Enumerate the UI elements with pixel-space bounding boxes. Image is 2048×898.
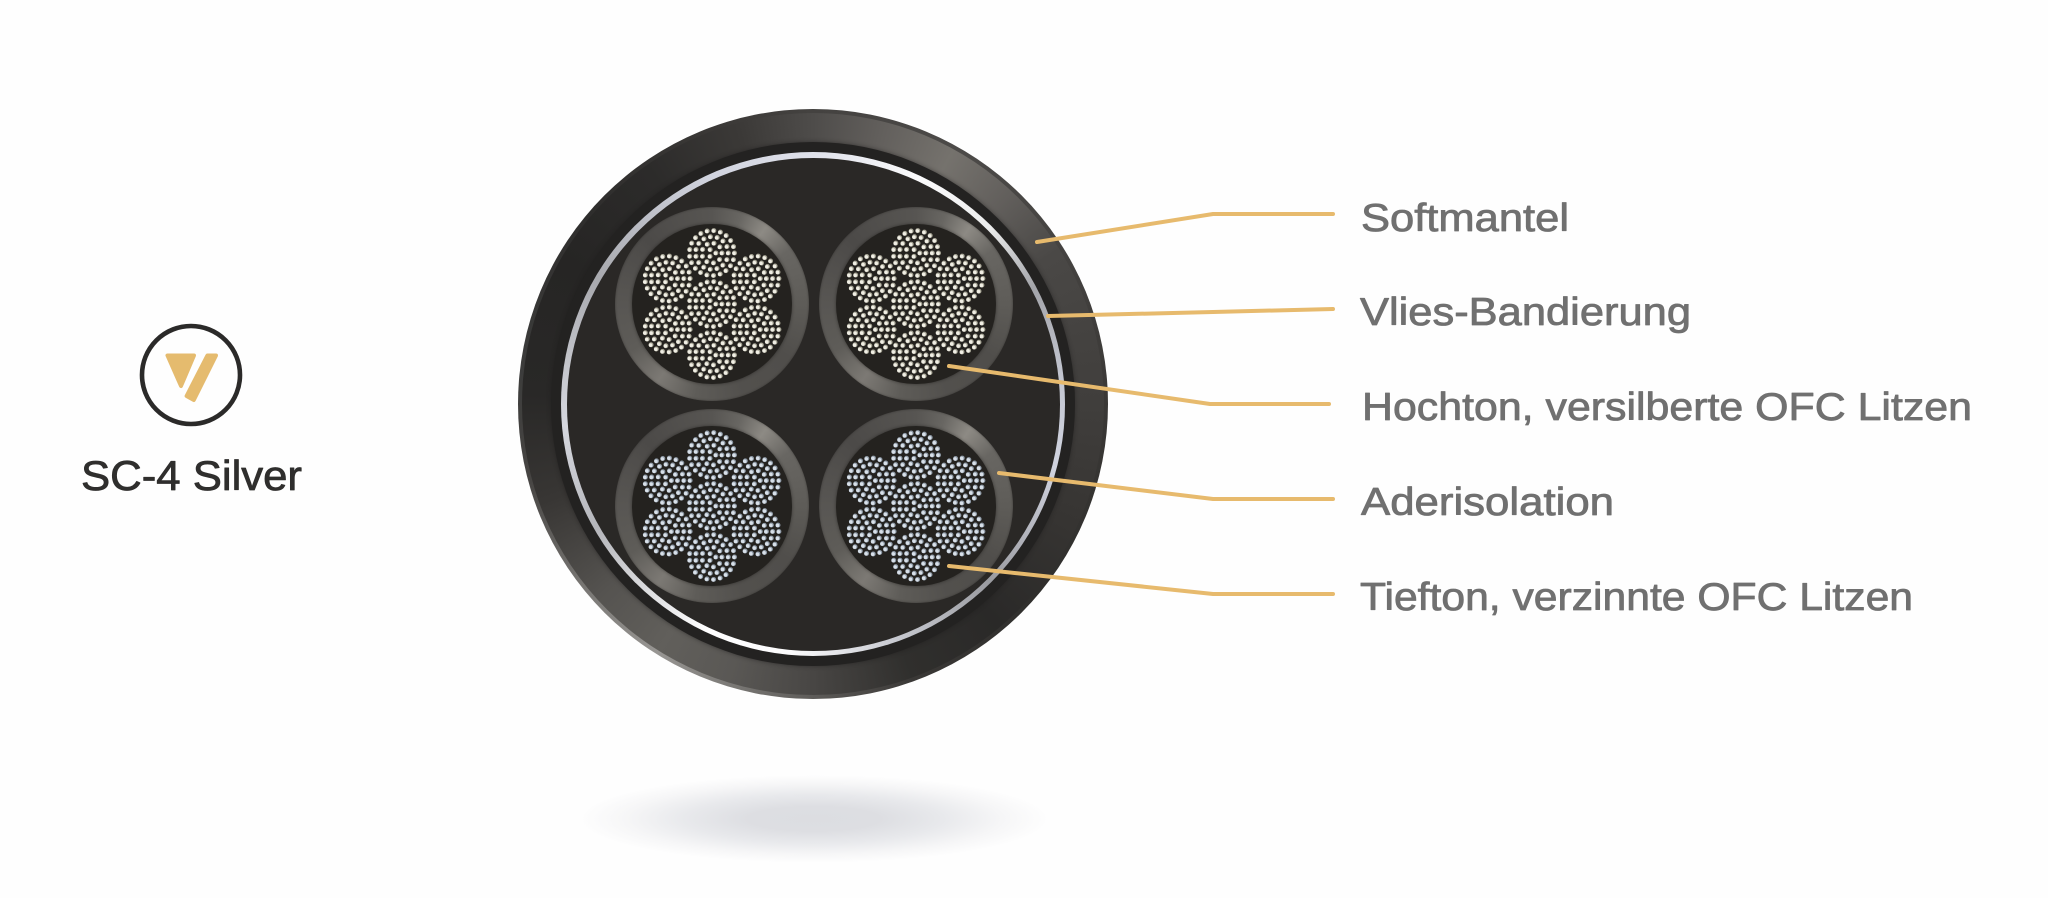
logo icon: V in circle (140, 324, 242, 426)
label: Hochton: Hochton, versilberte OFC Litzen (1362, 386, 1972, 429)
cable filler (566, 158, 1060, 650)
leader line: Aderisolation (999, 473, 1333, 499)
cable cross-section (518, 109, 1108, 699)
drop shadow under cable (579, 775, 1049, 863)
product name: SC-4 Silver (81, 452, 302, 499)
outer soft jacket (522, 113, 1104, 695)
inner dark band (551, 142, 1075, 666)
outer bevel rim (518, 109, 1108, 699)
label: Softmantel: Softmantel (1361, 197, 1569, 240)
leader line: Tiefton (949, 566, 1333, 594)
silver fleece wrap ring (561, 152, 1065, 656)
core: top right, silver-plated strands (819, 207, 1013, 401)
leader line: Softmantel (1037, 214, 1333, 242)
leader line: Vlies-Bandierung (1048, 309, 1333, 316)
label: Tiefton: Tiefton, verzinnte OFC Litzen (1360, 576, 1913, 619)
label: Vlies-Bandierung: Vlies-Bandierung (1360, 291, 1691, 334)
core: bottom left, tinned strands (615, 409, 809, 603)
label: Aderisolation: Aderisolation (1361, 481, 1614, 524)
core: top left, silver-plated strands (615, 207, 809, 401)
leader line: Hochton (949, 366, 1329, 404)
core: bottom right, tinned strands (819, 409, 1013, 603)
